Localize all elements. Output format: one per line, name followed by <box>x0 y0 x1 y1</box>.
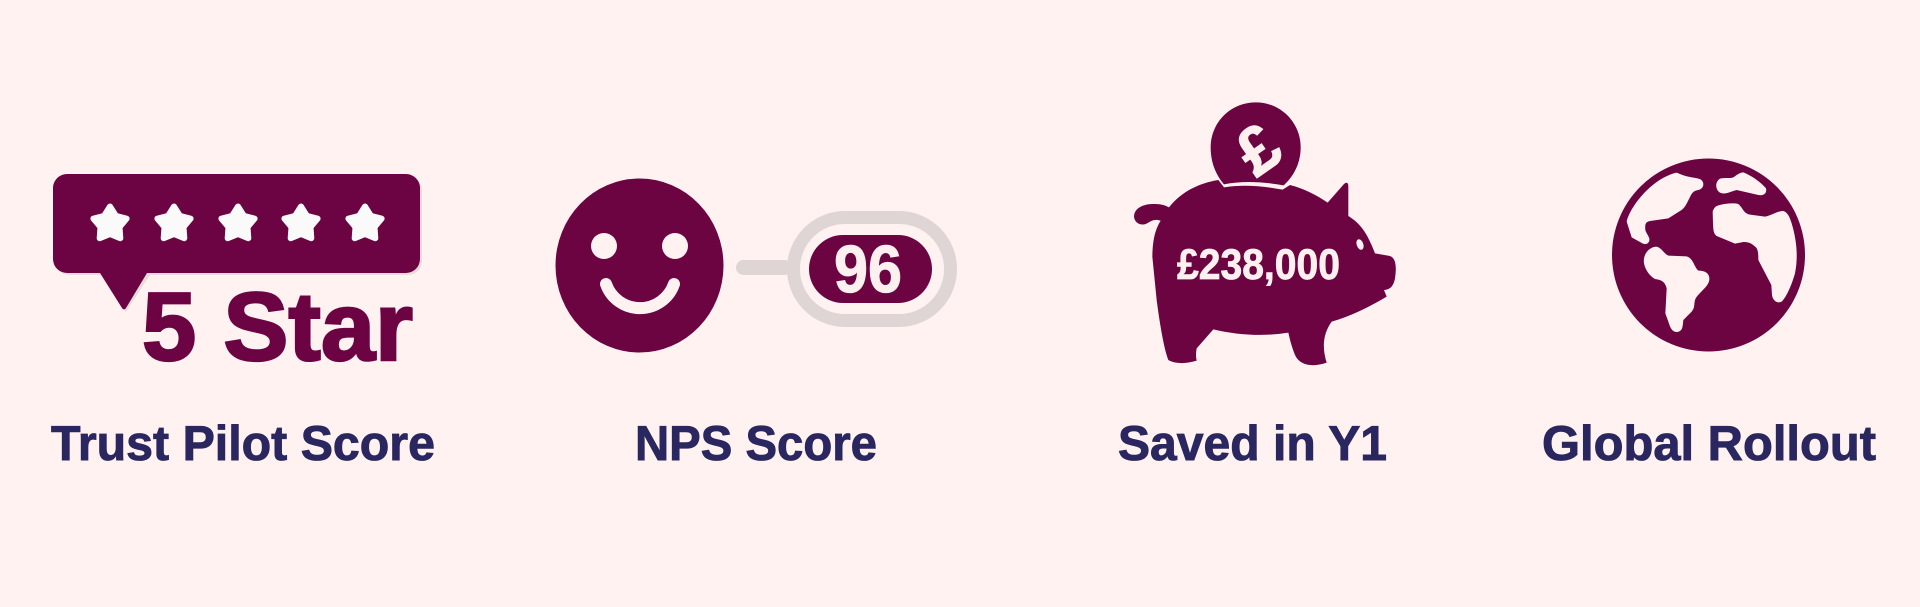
panel: savings <box>1118 102 1396 471</box>
icon: globe <box>1612 158 1805 352</box>
label: Saved in Y1: Saved in Y1 <box>1118 417 1387 471</box>
amount: £238,000: £238,000 <box>1177 241 1340 289</box>
label: Global Rollout: Global Rollout <box>1542 417 1876 471</box>
icon: speech bubble with five stars <box>53 174 422 312</box>
icon: pound sign on coin: £ <box>1222 108 1294 190</box>
label: Trust Pilot Score: Trust Pilot Score <box>51 417 435 471</box>
score badge: 96: 96 <box>834 232 902 307</box>
icon: pig eye <box>1355 238 1365 251</box>
panel: Trust Pilot score <box>51 174 435 471</box>
rating text: 5 Star: 5 Star <box>142 272 413 381</box>
icon: piggy bank with coin <box>1134 102 1396 365</box>
connector line <box>736 260 792 275</box>
icon: smiley face <box>556 178 724 352</box>
label: NPS Score: NPS Score <box>635 417 877 471</box>
panel: global rollout <box>1542 158 1876 471</box>
panel: NPS score <box>556 178 950 471</box>
score badge: 96 <box>794 218 950 320</box>
